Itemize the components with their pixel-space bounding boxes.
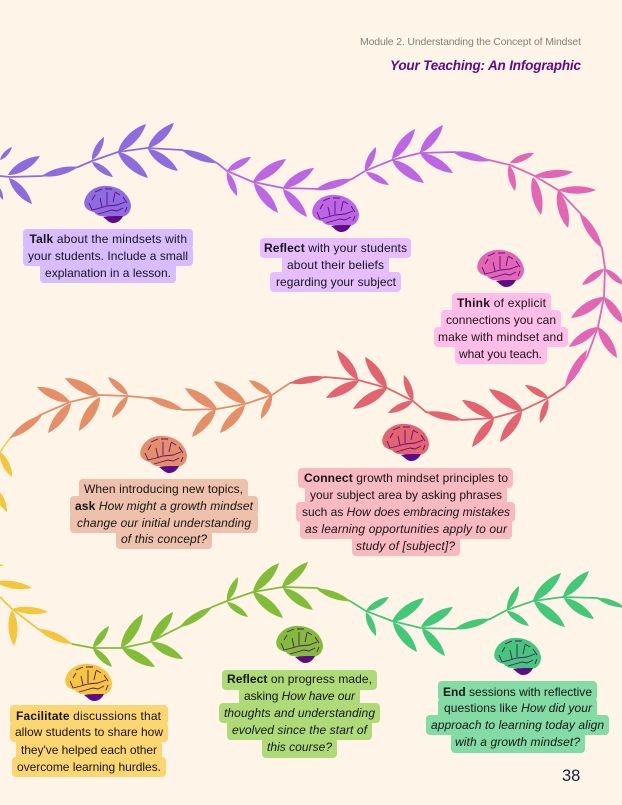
branch: green [350, 568, 622, 659]
text block: End: End sessions with reflective [443, 685, 592, 699]
text block: Reflect with students: Reflect with your students [264, 241, 407, 255]
text block: Reflect on progress: this course? [267, 740, 332, 754]
icon: brain purple [84, 186, 131, 223]
icon: brain pink [477, 250, 524, 287]
icon: brain violet [312, 195, 359, 232]
text block: Talk: your students. Include a small [28, 249, 188, 263]
text block: Facilitate [10, 705, 168, 777]
text block: Reflect on progress: Reflect on progress made, [227, 672, 372, 686]
text block: Connect [296, 468, 515, 556]
icon: brain orange [140, 436, 187, 473]
title: Your Teaching: An Infographic [390, 58, 581, 73]
text block: Connect: your subject area by asking phrases [310, 488, 502, 502]
text block: End: approach to learning today align [431, 718, 604, 732]
branch: yellow [0, 438, 73, 647]
text block: Think: make with mindset and [438, 330, 563, 344]
text block: Reflect on progress: asking How have our [244, 689, 356, 703]
text block: Reflect on progress [219, 670, 380, 758]
text block: Facilitate: they've helped each other [21, 743, 157, 757]
icon: brain yellow [65, 664, 112, 701]
text block: Think [434, 293, 568, 364]
branch: orange [8, 374, 290, 441]
text block: Talk [23, 229, 193, 283]
text block: When introducing [70, 479, 258, 549]
text block: Connect: such as How does embracing mistakes [302, 505, 510, 519]
icon: brain lime [276, 626, 323, 663]
icon: brain red [382, 424, 429, 461]
text block: Facilitate: allow students to share how [15, 725, 163, 739]
text block: Connect: study of [subject]? [356, 539, 455, 553]
text block: When introducing: of this concept? [121, 532, 207, 546]
text block: Connect: as learning opportunities apply to our [305, 522, 508, 536]
text block: Reflect with students: regarding your subject [276, 275, 397, 289]
text block: End: questions like How did your [444, 701, 593, 715]
text block: Connect: Connect growth mindset principles to [304, 471, 508, 485]
text block: Reflect with students: about their beliefs [287, 258, 384, 272]
text block: When introducing: When introducing new topics, [84, 482, 243, 496]
text block: When introducing: ask How might a growth mindset [75, 499, 254, 513]
text block: Think: connections you can [446, 313, 556, 327]
text block: End: with a growth mindset? [455, 735, 580, 749]
module header: Module 2. Understanding the Concept of Mindset [360, 36, 581, 48]
text block: Reflect with students [260, 238, 411, 292]
branch: red [289, 347, 565, 450]
text block: End [426, 681, 609, 753]
branch: pink [489, 150, 622, 398]
text block: Talk: explanation in a lesson. [45, 266, 171, 280]
text block: Reflect on progress: thoughts and understanding [224, 706, 375, 720]
branch: purple [0, 120, 218, 207]
text block: Facilitate: overcome learning hurdles. [17, 760, 161, 774]
text block: Facilitate: Facilitate discussions that [16, 709, 162, 723]
text block: Reflect on progress: evolved since the start of [232, 723, 369, 737]
text block: When introducing: change our initial understanding [77, 516, 251, 530]
icon: brain green [494, 638, 541, 675]
text block: Talk: Talk about the mindsets with [30, 232, 187, 246]
branch: lime green [72, 559, 351, 671]
text block: Think: Think of explicit [457, 296, 547, 310]
page number: 38 [562, 767, 580, 785]
branch: violet [217, 122, 490, 220]
text block: Think: what you teach. [458, 347, 542, 361]
